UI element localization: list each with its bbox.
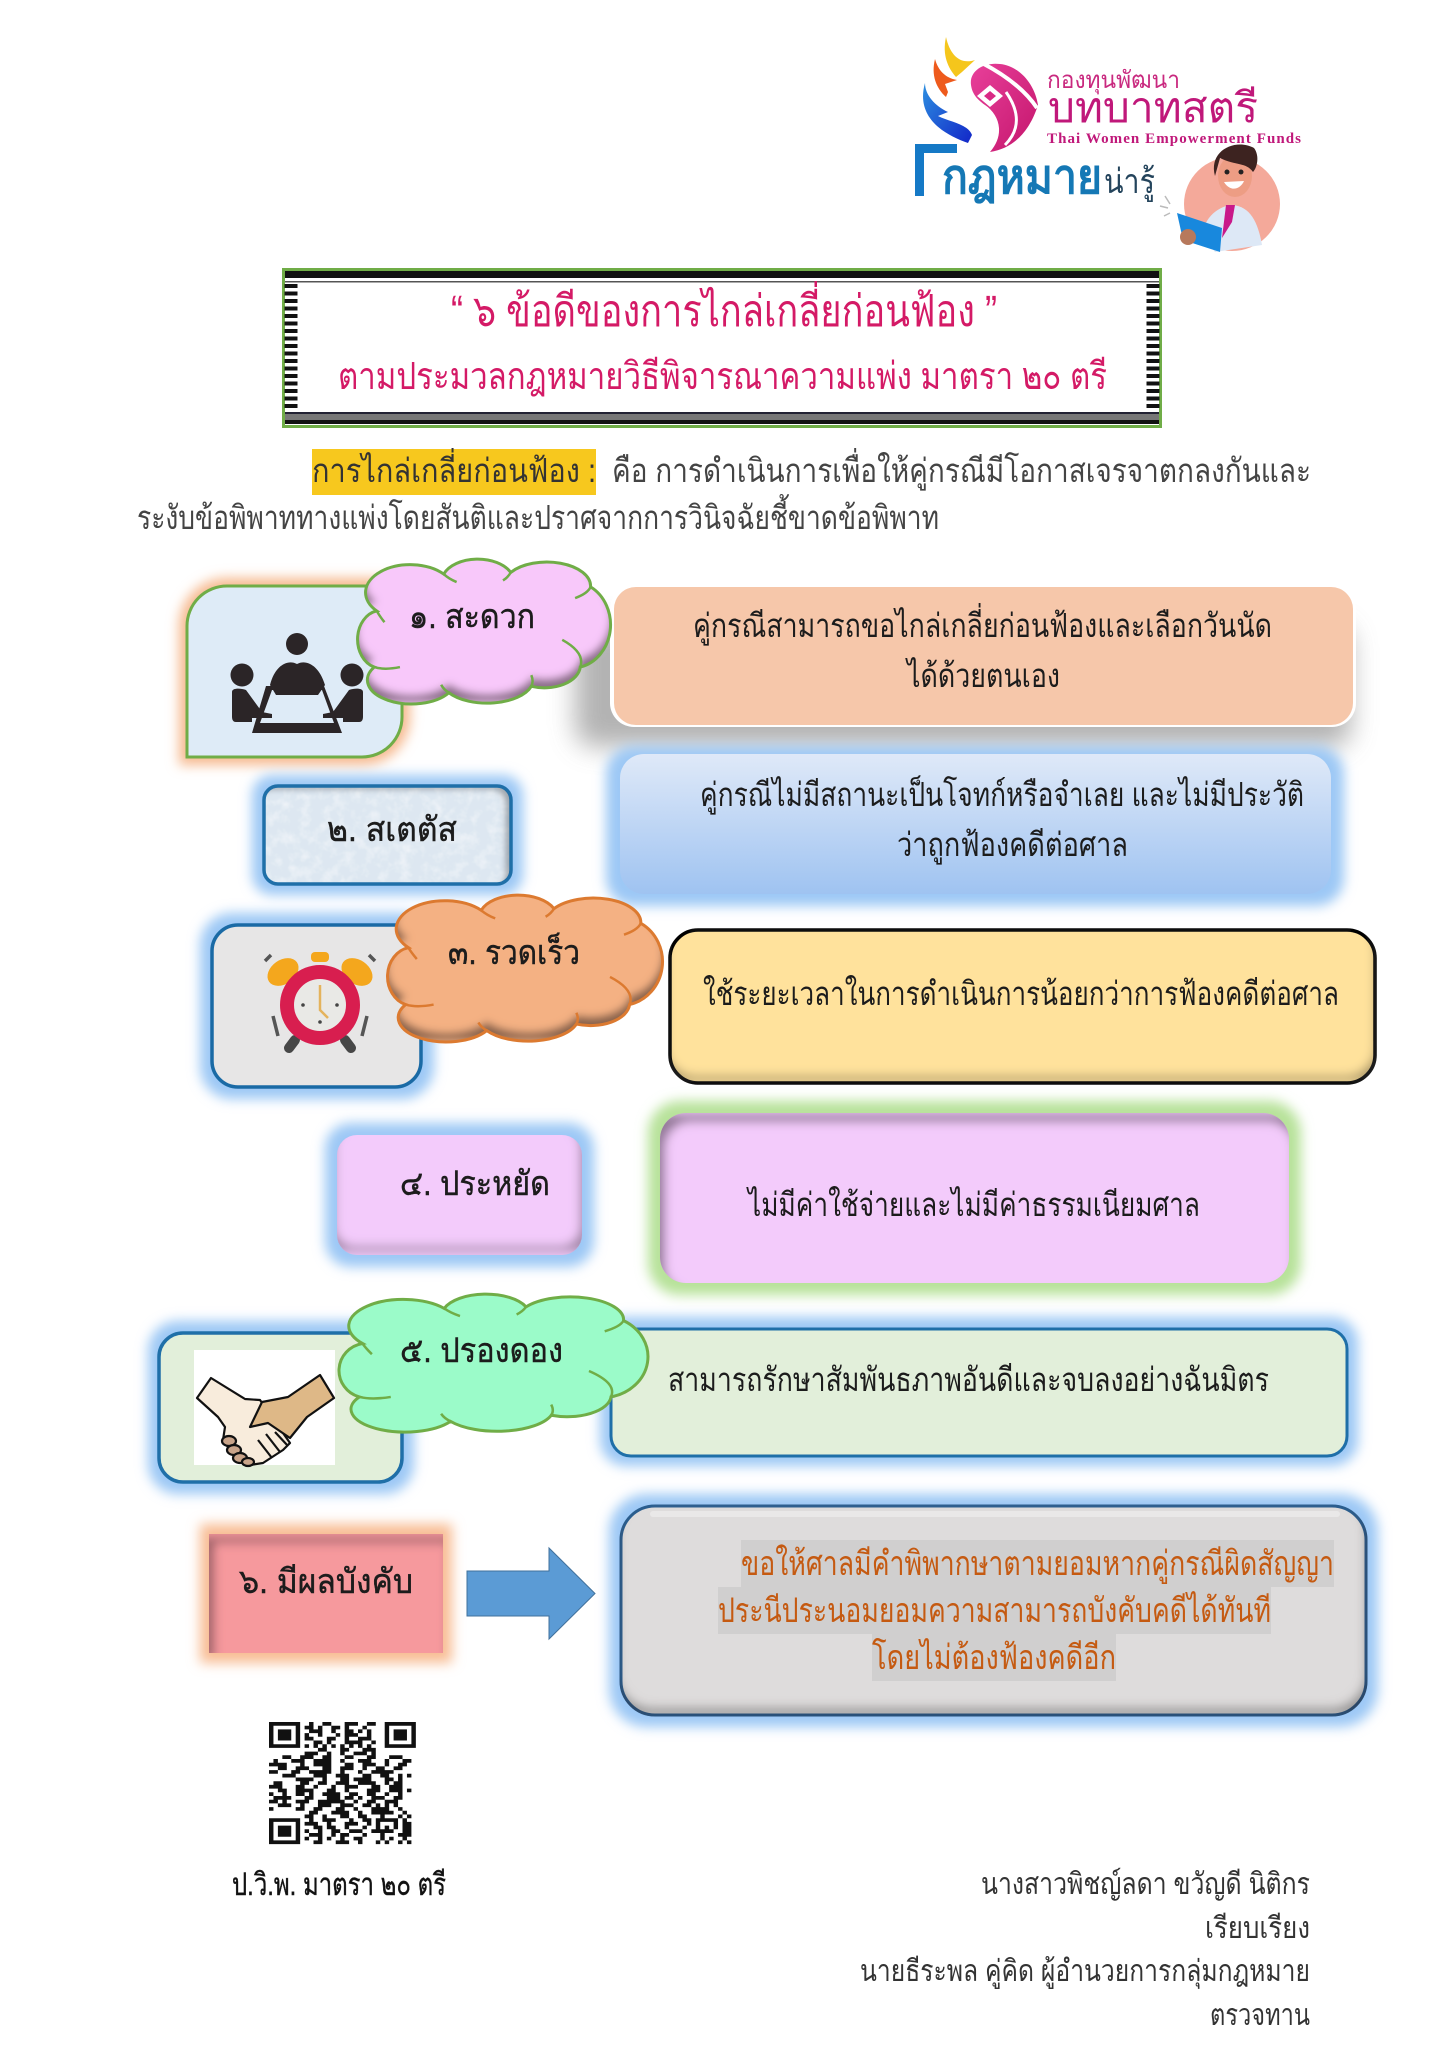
panel: enforceable description: ประนีประนอมยอมความสามารถบังคับคดีได้ทันที bbox=[718, 1591, 1271, 1630]
icon: handshake bbox=[197, 1375, 334, 1466]
panel: enforceable description: โดยไม่ต้องฟ้องคดีอีก bbox=[872, 1638, 1116, 1677]
cloud label: 3 fast: ๓. รวดเร็ว bbox=[448, 932, 580, 972]
QR caption: ป.วิ.พ. มาตรา ๒๐ ตรี bbox=[232, 1867, 446, 1902]
panel: convenient description: ได้ด้วยตนเอง bbox=[905, 657, 1060, 694]
panel: harmony description: สามารถรักษาสัมพันธภาพอันดีและจบลงอย่างฉันมิตร bbox=[668, 1361, 1269, 1398]
credits text block: ตรวจทาน bbox=[1210, 1999, 1310, 2032]
logo text: fund name: บทบาทสตรี bbox=[1048, 84, 1258, 131]
panel: harmony description bbox=[600, 1317, 1358, 1466]
panel: enforceable label: ๖. มีผลบังคับ bbox=[239, 1563, 413, 1601]
panel: status description: คู่กรณีไม่มีสถานะเป็นโจทก์หรือจำเลย และไม่มีประวัติ bbox=[700, 775, 1304, 815]
definition text block bbox=[137, 448, 1311, 536]
cloud label: 3 fast bbox=[388, 895, 663, 1042]
cloud label: 1 convenient: ๑. สะดวก bbox=[409, 598, 535, 636]
panel: speed description bbox=[670, 930, 1375, 1083]
panel: speed icon card bbox=[200, 913, 434, 1099]
definition text block: ระงับข้อพิพาททางแพ่งโดยสันติและปราศจากการวินิจฉัยชี้ขาดข้อพิพาท bbox=[137, 494, 939, 536]
icon: cartoon man with folder bbox=[1160, 144, 1280, 252]
panel: convenient description: คู่กรณีสามารถขอไกล่เกลี่ยก่อนฟ้องและเลือกวันนัด bbox=[693, 603, 1272, 646]
panel: harmony icon card bbox=[148, 1321, 414, 1494]
credits text block: นางสาวพิชญ์ลดา ขวัญดี นิติกร bbox=[981, 1867, 1310, 1901]
credits text block: เรียบเรียง bbox=[1205, 1912, 1310, 1945]
panel: enforceable label bbox=[200, 1524, 452, 1663]
title banner bbox=[282, 268, 1162, 428]
cloud label: 5 harmony: ๕. ปรองดอง bbox=[400, 1332, 563, 1370]
logo text: fund name bbox=[1047, 67, 1301, 147]
logo text: fund name: Thai Women Empowerment Funds bbox=[1047, 131, 1301, 147]
heading: law to know: กฎหมาย bbox=[942, 151, 1102, 204]
panel: status label: ๒. สเตตัส bbox=[327, 811, 457, 849]
panel: convenient description bbox=[575, 585, 1356, 747]
icon: flame emblem bbox=[923, 37, 1038, 152]
panel: convenient icon card bbox=[187, 586, 402, 757]
definition text block: คือ การดำเนินการเพื่อให้คู่กรณีมีโอกาสเจรจาตกลงกันและ bbox=[612, 448, 1311, 491]
cloud label: 5 harmony bbox=[339, 1294, 648, 1432]
panel: saving label bbox=[325, 1123, 594, 1267]
heading: law to know: น่ารู้ bbox=[1104, 163, 1155, 202]
heading: law to know bbox=[915, 144, 1155, 204]
panel: saving label: ๔. ประหยัด bbox=[400, 1165, 550, 1203]
icon: alarm clock bbox=[262, 952, 378, 1048]
logo: Thai Women Empowerment Funds and law badge bbox=[915, 37, 1301, 252]
panel: status description bbox=[606, 746, 1344, 906]
credits text block: นายธีระพล คู่คิด ผู้อำนวยการกลุ่มกฎหมาย bbox=[860, 1955, 1310, 1990]
panel: status label bbox=[252, 775, 523, 895]
icon: meeting table bbox=[230, 633, 364, 733]
credits text block bbox=[860, 1867, 1310, 2032]
definition text block: การไกล่เกลี่ยก่อนฟ้อง : bbox=[312, 448, 596, 489]
logo text: fund name: กองทุนพัฒนา bbox=[1047, 67, 1180, 95]
panel: status description: ว่าถูกฟ้องคดีต่อศาล bbox=[897, 826, 1128, 865]
title line 2: ตามประมวลกฎหมายวิธีพิจารณาความแพ่ง มาตรา ๒๐ ตรี bbox=[338, 356, 1107, 398]
QR code bbox=[269, 1722, 416, 1844]
panel: enforceable description bbox=[609, 1494, 1378, 1727]
title line 1: “ ๖ ข้อดีของการไกล่เกลี่ยก่อนฟ้อง ” bbox=[451, 280, 997, 336]
cloud label: 1 convenient bbox=[358, 559, 611, 704]
arrow bbox=[467, 1548, 595, 1639]
panel: saving description bbox=[648, 1101, 1301, 1295]
panel: saving description: ไม่มีค่าใช้จ่ายและไม่มีค่าธรรมเนียมศาล bbox=[746, 1186, 1200, 1223]
